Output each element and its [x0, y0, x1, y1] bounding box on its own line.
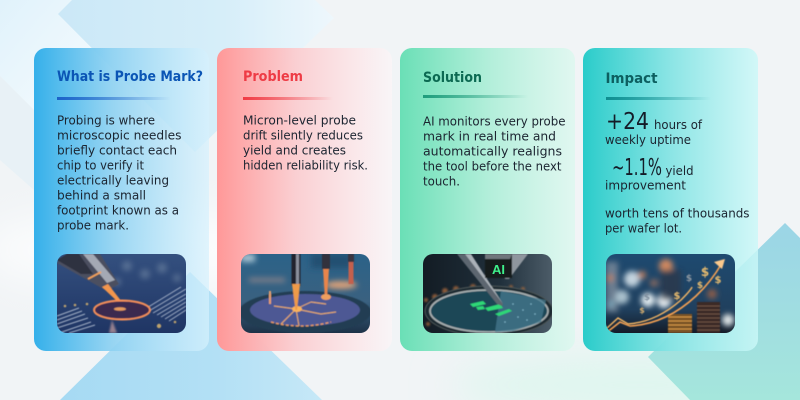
- dollar signs: $: [697, 281, 703, 291]
- body text: worth tens of thousands: [605, 206, 750, 220]
- dollar signs: $: [644, 293, 650, 303]
- body text: Micron-level probe: [243, 114, 356, 128]
- panel: impact: [583, 48, 758, 351]
- body text: Probing is where: [57, 114, 155, 128]
- body text: [605, 109, 750, 236]
- panel: problem: [217, 48, 392, 351]
- body text: mark in real time and: [423, 130, 556, 144]
- body text: behind a small: [57, 188, 146, 202]
- stat: uptime: +24: [606, 109, 649, 135]
- dollar signs: $: [639, 306, 645, 315]
- body text: electrically leaving: [57, 174, 169, 188]
- heading: Impact: [606, 71, 658, 87]
- body text: chip to verify it: [57, 158, 144, 172]
- image: needles on cracked wafer: [239, 254, 371, 333]
- body text: probe mark.: [57, 218, 129, 232]
- image: rising chart over coins: [606, 254, 735, 333]
- body text: hours of: [654, 118, 703, 132]
- body text: drift silently reduces: [243, 128, 363, 142]
- panel: solution: [400, 48, 575, 351]
- dollar signs: $: [715, 275, 722, 286]
- heading: Solution: [423, 70, 482, 86]
- image: probe needle on circuit: [57, 254, 186, 333]
- panel: what is probe mark: [34, 48, 209, 351]
- body text: [423, 114, 566, 188]
- body text: [57, 114, 182, 232]
- dollar signs: $: [701, 265, 709, 279]
- body text: touch.: [423, 174, 460, 188]
- dollar signs: $: [674, 291, 681, 302]
- body text: AI monitors every probe: [423, 114, 566, 128]
- body text: automatically realigns: [423, 144, 562, 158]
- body text: microscopic needles: [57, 128, 182, 142]
- stat: yield: ~1.1%: [612, 155, 662, 181]
- dollar signs: [639, 265, 722, 315]
- body text: per wafer lot.: [605, 222, 682, 236]
- body text: briefly contact each: [57, 144, 177, 158]
- body text: [243, 114, 368, 172]
- heading: What is Probe Mark?: [57, 69, 203, 85]
- body text: yield: [666, 164, 694, 178]
- body text: hidden reliability risk.: [243, 158, 368, 172]
- body text: improvement: [605, 178, 686, 192]
- dollar signs: $: [686, 274, 692, 284]
- body text: the tool before the next: [423, 160, 562, 174]
- body text: weekly uptime: [605, 133, 691, 147]
- body text: yield and creates: [243, 144, 346, 158]
- heading: Problem: [243, 69, 303, 85]
- body text: footprint known as a: [57, 204, 179, 218]
- AI label: AI: [492, 262, 505, 277]
- image: AI probe over wafer: [423, 254, 553, 336]
